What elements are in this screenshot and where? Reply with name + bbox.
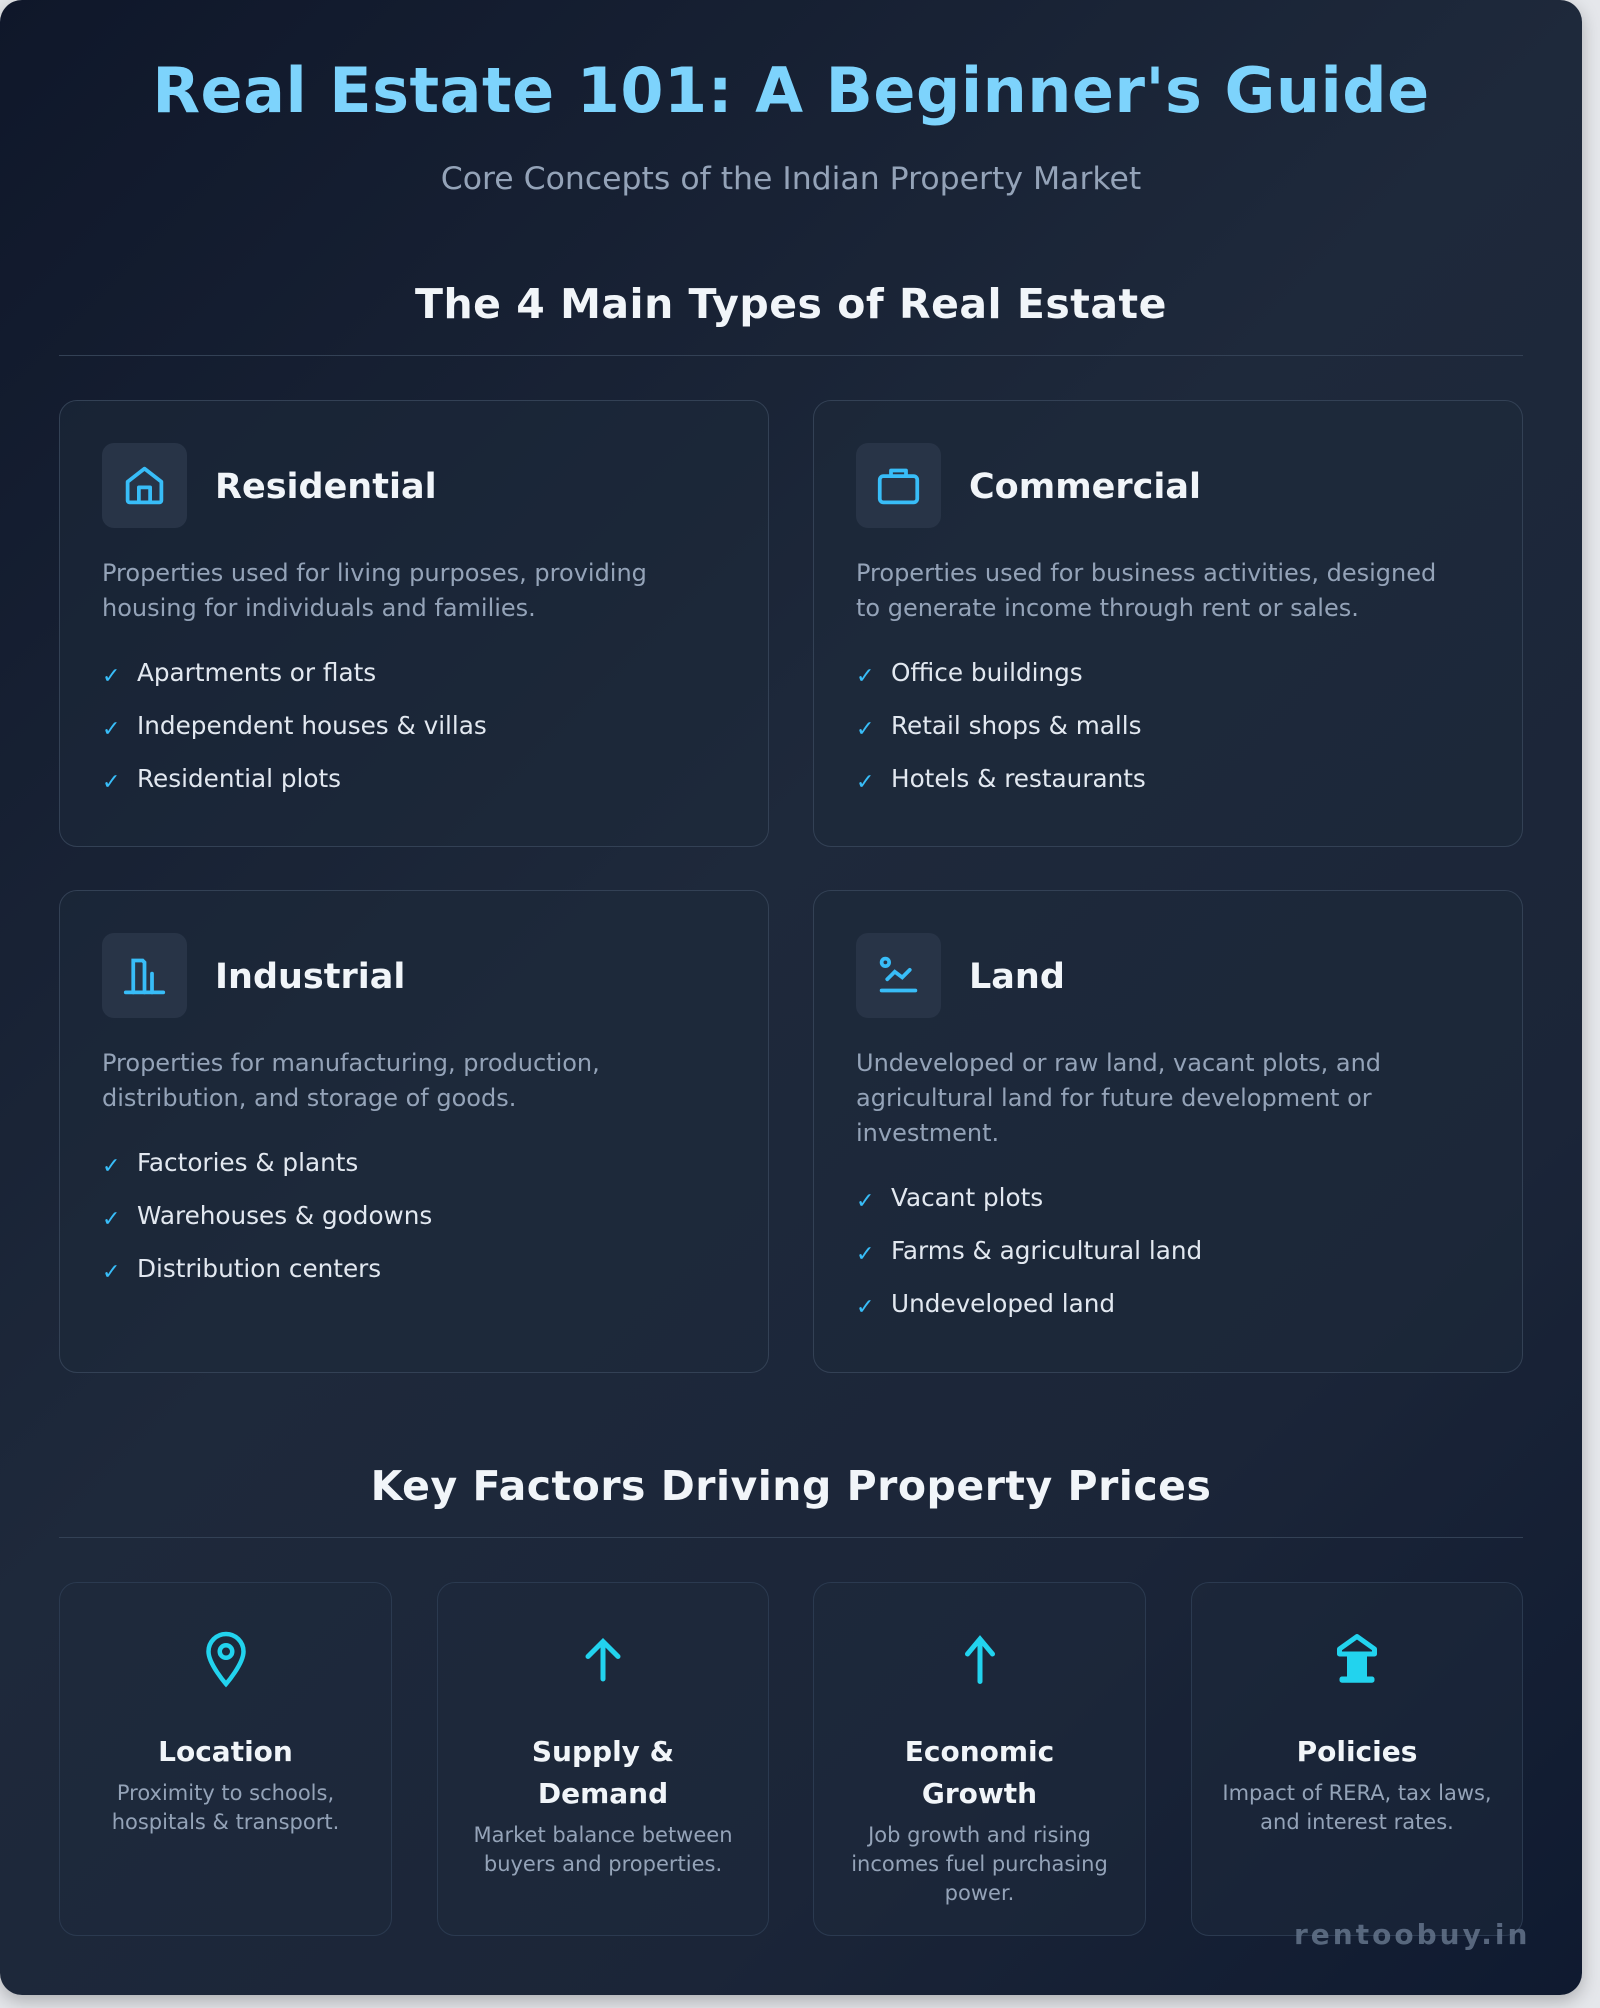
description: Properties for manufacturing, production, distribution, and storage of goods. bbox=[102, 1049, 600, 1112]
icon: factory bbox=[102, 933, 187, 1018]
factor title: Growth bbox=[922, 1777, 1037, 1810]
description: Undeveloped or raw land, vacant plots, and agricultural land for future development or investment. bbox=[856, 1049, 1381, 1147]
list: Retail shops & malls bbox=[891, 711, 1141, 740]
factor desc: Proximity to schools, hospitals & transport. bbox=[112, 1781, 339, 1834]
list: ✓ bbox=[856, 1295, 874, 1320]
list: ✓ bbox=[102, 1154, 120, 1179]
factor title bbox=[905, 1735, 1054, 1810]
list: ✓ bbox=[856, 717, 874, 742]
panel: commercial bbox=[813, 400, 1523, 847]
panel: economic bbox=[813, 1582, 1146, 1936]
panel: location bbox=[59, 1582, 392, 1936]
panel: residential bbox=[59, 400, 769, 847]
list: Office buildings bbox=[891, 658, 1083, 687]
list: ✓ bbox=[856, 1189, 874, 1214]
list bbox=[856, 1183, 1202, 1320]
panel: industrial bbox=[59, 890, 769, 1373]
list: ✓ bbox=[856, 664, 874, 689]
factor title bbox=[532, 1735, 674, 1810]
icon: arrow up bbox=[965, 1635, 995, 1684]
description: Properties used for business activities, designed to generate income through rent or sales. bbox=[856, 559, 1436, 622]
icon: institution bbox=[1337, 1634, 1377, 1683]
icon: land bbox=[856, 933, 941, 1018]
list: ✓ bbox=[856, 1242, 874, 1267]
panel: policies bbox=[1191, 1582, 1523, 1936]
description: Properties used for living purposes, providing housing for individuals and families. bbox=[102, 559, 647, 622]
factor title: Policies bbox=[1297, 1735, 1417, 1768]
card title: Residential bbox=[215, 467, 437, 507]
list bbox=[856, 658, 1146, 795]
list: Farms & agricultural land bbox=[891, 1236, 1202, 1265]
icon: arrow up bbox=[586, 1638, 620, 1682]
list: ✓ bbox=[856, 770, 874, 795]
heading: types: The 4 Main Types of Real Estate bbox=[415, 280, 1167, 328]
list: Apartments or flats bbox=[137, 658, 376, 687]
icon: pin bbox=[206, 1632, 246, 1688]
factor title: Demand bbox=[538, 1777, 668, 1810]
title: Real Estate 101: A Beginner's Guide bbox=[152, 54, 1430, 127]
panel: supply bbox=[437, 1582, 769, 1936]
factor title: Economic bbox=[905, 1735, 1054, 1768]
watermark: rentoobuy.in bbox=[1294, 1918, 1530, 1951]
icon: briefcase bbox=[856, 443, 941, 528]
list: Hotels & restaurants bbox=[891, 764, 1146, 793]
panel: land bbox=[813, 890, 1523, 1373]
factor desc: Impact of RERA, tax laws, and interest rates. bbox=[1222, 1781, 1492, 1834]
list: Undeveloped land bbox=[891, 1289, 1115, 1318]
factor title: Location bbox=[158, 1735, 293, 1768]
list: Independent houses & villas bbox=[137, 711, 487, 740]
card title: Land bbox=[969, 957, 1065, 997]
subtitle: Core Concepts of the Indian Property Market bbox=[441, 161, 1141, 197]
card title: Commercial bbox=[969, 467, 1201, 507]
list: ✓ bbox=[102, 717, 120, 742]
factor desc: Market balance between buyers and properties. bbox=[473, 1823, 733, 1876]
list: ✓ bbox=[102, 770, 120, 795]
factor desc: Job growth and rising incomes fuel purchasing power. bbox=[851, 1823, 1108, 1905]
list: ✓ bbox=[102, 1260, 120, 1285]
list: ✓ bbox=[102, 1207, 120, 1232]
list: ✓ bbox=[102, 664, 120, 689]
list bbox=[102, 1148, 432, 1285]
list: Residential plots bbox=[137, 764, 341, 793]
list: Vacant plots bbox=[891, 1183, 1043, 1212]
list: Factories & plants bbox=[137, 1148, 358, 1177]
list: Distribution centers bbox=[137, 1254, 381, 1283]
card title: Industrial bbox=[215, 957, 405, 997]
heading: factors: Key Factors Driving Property Prices bbox=[371, 1462, 1211, 1510]
list: Warehouses & godowns bbox=[137, 1201, 432, 1230]
factor title: Supply & bbox=[532, 1735, 674, 1768]
list bbox=[102, 658, 487, 795]
icon: house bbox=[102, 443, 187, 528]
